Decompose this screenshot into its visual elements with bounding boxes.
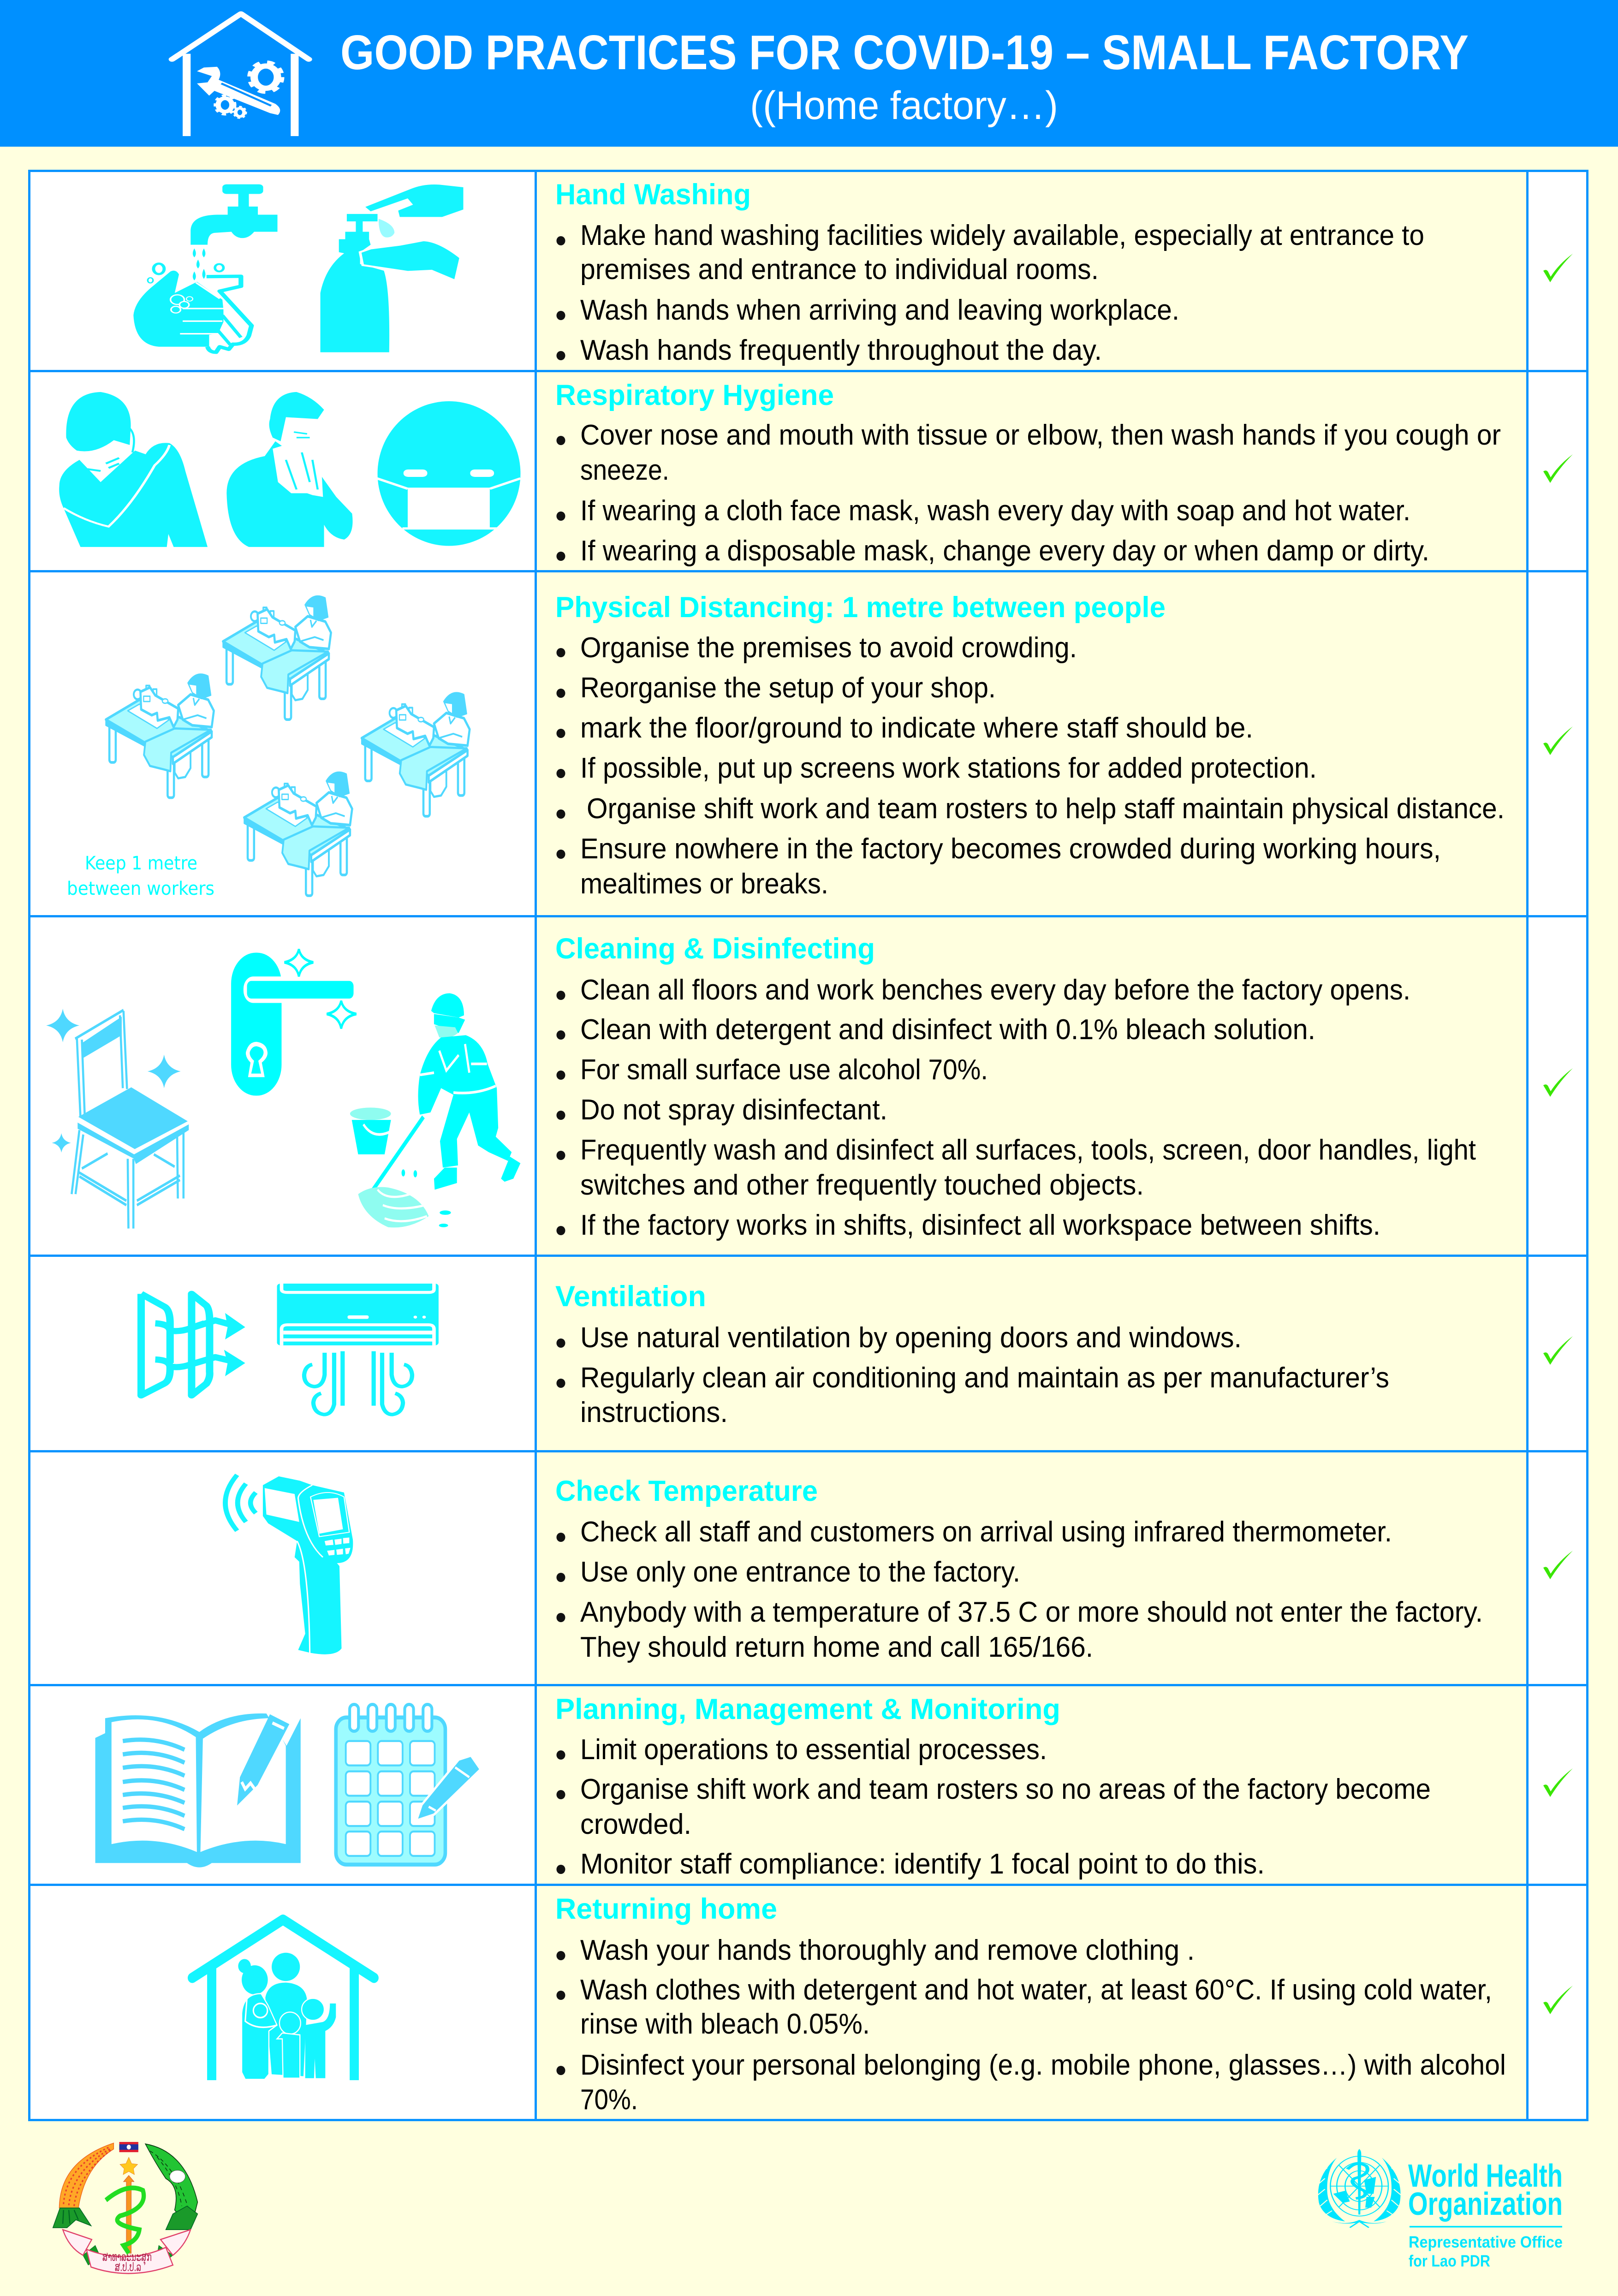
sub: sanitiser bottle [321, 214, 389, 352]
bullet: personal belongings: Disinfect your personal belonging (e.g. mobile phone, glasses…) with alcohol [580, 2049, 1506, 2081]
bullet: nowhere crowded: mealtimes or breaks. [580, 868, 828, 900]
header banner [0, 0, 1618, 147]
bullet: detergent: Clean with detergent and disinfect with 0.1% bleach solution. [580, 1014, 1315, 1046]
WHO name: World Health [1408, 2158, 1563, 2194]
icon: check mark [1543, 1551, 1573, 1579]
bullet: mark floor: mark the floor/ground to indicate where staff should be. [580, 712, 1253, 744]
bullet: rosters [556, 1773, 1431, 1840]
bullet: reorganise: Reorganise the setup of your shop. [580, 672, 996, 704]
WHO name [1408, 2158, 1563, 2270]
WHO name: Organization [1408, 2186, 1563, 2222]
bullet: wash clothes [556, 1974, 1492, 2040]
bullet: surfaces [556, 1134, 1476, 1201]
bullet: cover nose [556, 419, 1501, 486]
heading: Hand Washing [555, 178, 751, 211]
bullet: temperature limit [556, 1596, 1483, 1663]
WHO name: for Lao PDR [1409, 2252, 1490, 2270]
bullet: shifts: If the factory works in shifts, disinfect all workspace between shifts. [580, 1209, 1380, 1241]
ribbon text [102, 2250, 152, 2274]
icon: check mark [1543, 254, 1573, 282]
bullet: screens: If possible, put up screens work stations for added protection. [580, 752, 1317, 784]
bullet: wash clothes: rinse with bleach 0.05%. [580, 2008, 870, 2040]
bullet: no spray: Do not spray disinfectant. [580, 1094, 887, 1126]
icon: check mark [1543, 1986, 1573, 2014]
panel: returning home [29, 1885, 1587, 2120]
panel: respiratory hygiene [29, 371, 1587, 571]
icon: check mark [1543, 726, 1573, 755]
bullet: cover nose: sneeze. [580, 454, 669, 486]
WHO name: Representative Office [1409, 2233, 1563, 2251]
bullet: compliance: Monitor staff compliance: identify 1 focal point to do this. [580, 1848, 1265, 1880]
panel: ventilation [29, 1255, 1587, 1451]
ribbon text: ສາທາລະນະສຸກ [102, 2250, 152, 2266]
bullet: surfaces: switches and other frequently touched objects. [580, 1169, 1144, 1201]
caption: keep 1 metre: Keep 1 metre [85, 853, 197, 874]
bullet: rosters: crowded. [580, 1808, 691, 1840]
bullet: one entrance: Use only one entrance to the factory. [580, 1556, 1020, 1588]
bullet: natural ventilation: Use natural ventilation by opening doors and windows. [580, 1322, 1242, 1354]
bullet: facilities: Make hand washing facilities widely available, especially at entrance to [580, 220, 1424, 251]
subtitle: ((Home factory…) [750, 83, 1058, 128]
bullet: alcohol: For small surface use alcohol 70%. [580, 1054, 988, 1086]
bullet: floors and benches: Clean all floors and work benches every day before the factory opens. [580, 974, 1410, 1006]
caption: keep 1 metre: between workers [67, 878, 214, 899]
heading: Cleaning & Disinfecting [555, 933, 875, 965]
heading: Physical Distancing: 1 metre between people [555, 591, 1166, 624]
icon: infrared thermometer [225, 1475, 353, 1654]
bullet: avoid crowding: Organise the premises to avoid crowding. [580, 632, 1077, 664]
heading: Check Temperature [555, 1475, 818, 1507]
icon: notebook and calendar with pencils [95, 1704, 481, 1868]
WHO emblem [1317, 2149, 1401, 2228]
icon: check mark [1543, 1068, 1573, 1097]
bullet: air conditioning [556, 1362, 1389, 1428]
panel: planning, management and monitoring [29, 1685, 1587, 1885]
panel: cleaning and disinfecting [29, 916, 1587, 1255]
bullet: cloth mask: If wearing a cloth face mask, wash every day with soap and hot water. [580, 495, 1410, 527]
bullet: frequently: Wash hands frequently throughout the day. [580, 334, 1102, 366]
bullet: rosters: Organise shift work and team rosters so no areas of the factory become [580, 1773, 1431, 1805]
bullet: disposable mask: If wearing a disposable mask, change every day or when damp or dirty. [580, 535, 1429, 567]
icon: person coughing, person sneezing, face mask [59, 392, 520, 547]
bullet: temperature limit: Anybody with a temperature of 37.5 C or more should not enter the factory. [580, 1596, 1483, 1628]
bullet: essential processes: Limit operations to essential processes. [580, 1734, 1047, 1766]
icon: tap and washing hands [133, 184, 463, 352]
icon: check mark [1543, 1768, 1573, 1797]
logo: World Health Organization [1317, 2149, 1563, 2270]
caption: keep 1 metre [67, 853, 214, 899]
bullet: personal belongings: 70%. [580, 2084, 638, 2116]
bullet: shift work: Organise shift work and team rosters to help staff maintain physical distance. [587, 793, 1505, 825]
icon: check mark [1543, 1336, 1573, 1365]
heading: Respiratory Hygiene [555, 379, 834, 411]
bullet: nowhere crowded: Ensure nowhere in the factory becomes crowded during working hours, [580, 833, 1441, 865]
bullet: cover nose: Cover nose and mouth with tissue or elbow, then wash hands if you cough or [580, 419, 1501, 451]
bullet: temperature limit: They should return home and call 165/166. [580, 1631, 1093, 1663]
heading: Planning, Management & Monitoring [555, 1693, 1060, 1725]
bullet: facilities: premises and entrance to individual rooms. [580, 254, 1099, 286]
heading: Ventilation [555, 1280, 706, 1313]
panel: physical distancing [29, 571, 1587, 916]
bullet: surfaces: Frequently wash and disinfect all surfaces, tools, screen, door handles, light [580, 1134, 1476, 1166]
title: GOOD PRACTICES FOR COVID-19 – SMALL FACTORY [340, 25, 1469, 80]
bullet: air conditioning: Regularly clean air conditioning and maintain as per manufacturer’s [580, 1362, 1389, 1394]
bullet: thermometer: Check all staff and customers on arrival using infrared thermometer. [580, 1516, 1392, 1548]
icon: clean chair, door handle and person mopping [46, 949, 520, 1229]
icon: check mark [1543, 454, 1573, 483]
panel: hand washing [29, 171, 1587, 371]
logo: Lao Ministry of Health emblem [53, 2142, 197, 2274]
icon: open window and air conditioner [141, 1284, 439, 1415]
icon: factory house with wrench and gears [172, 14, 309, 136]
icon: four sewing workers spaced apart [106, 596, 470, 896]
bullet: air conditioning: instructions. [580, 1397, 728, 1428]
ribbon text: ສ.ປ.ປ.ລ [115, 2260, 141, 2274]
bullet: wash hands: Wash your hands thoroughly and remove clothing . [580, 1934, 1195, 1966]
bullet: facilities [556, 220, 1424, 286]
bullet: arriving: Wash hands when arriving and leaving workplace. [580, 294, 1179, 326]
bullet: personal belongings [556, 2049, 1506, 2116]
bullet: wash clothes: Wash clothes with detergent and hot water, at least 60°C. If using cold water, [580, 1974, 1492, 2006]
icon: family inside house [192, 1920, 374, 2080]
heading: Returning home [555, 1893, 777, 1925]
panel: check temperature [29, 1451, 1587, 1685]
bullet: nowhere crowded [556, 833, 1441, 900]
